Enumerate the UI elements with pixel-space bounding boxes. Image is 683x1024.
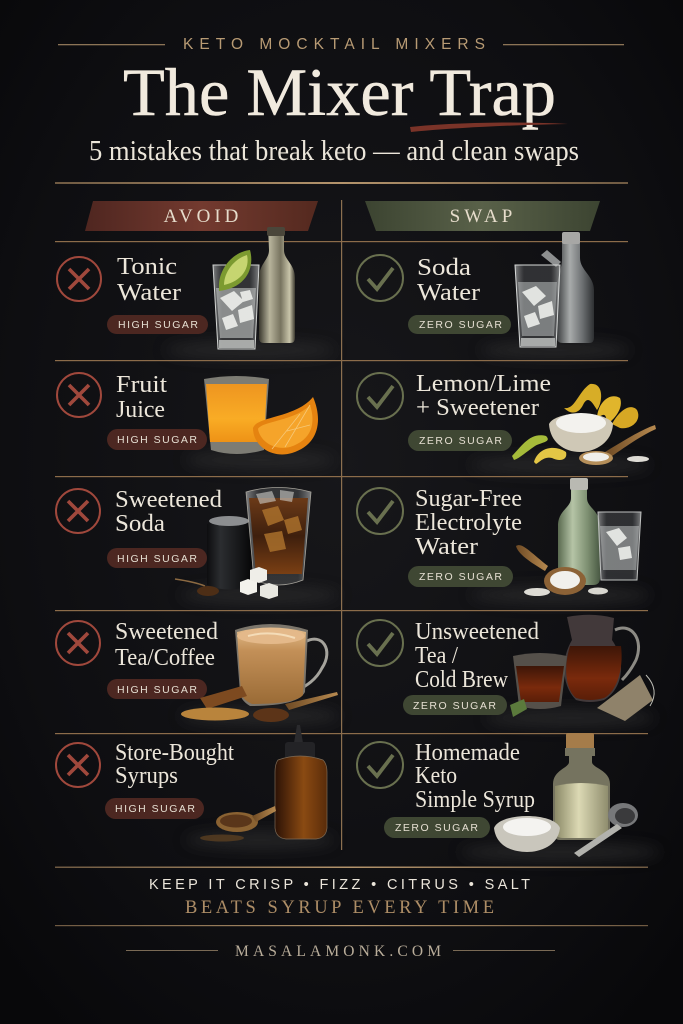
title: The Mixer Trap xyxy=(123,54,556,130)
label xyxy=(115,740,234,789)
badge: HIGH SUGAR xyxy=(115,803,197,815)
avoid banner xyxy=(85,201,318,231)
title underline brush stroke xyxy=(410,123,568,132)
illustration: soda bottle and glass xyxy=(515,232,594,347)
icon: x xyxy=(56,489,100,533)
badge: ZERO SUGAR xyxy=(419,435,503,447)
row: soda water xyxy=(357,232,594,347)
subtitle: 5 mistakes that break keto — and clean swaps xyxy=(89,136,579,167)
badge xyxy=(403,695,507,715)
footer tagline xyxy=(149,877,530,918)
label: Sugar-Free xyxy=(415,486,522,512)
badge xyxy=(408,315,511,334)
label: Soda xyxy=(417,255,471,281)
illustration: electrolyte bottle, glass, spoon xyxy=(516,478,641,596)
swap banner xyxy=(365,201,600,231)
row: homemade keto syrup xyxy=(357,733,638,857)
badge: HIGH SUGAR xyxy=(117,684,199,696)
header divider xyxy=(55,182,628,184)
label xyxy=(415,619,539,693)
row: tonic water xyxy=(57,227,295,349)
row: fruit juice xyxy=(57,372,318,454)
website credit: MASALAMONK.COM xyxy=(235,943,441,960)
label: Water xyxy=(417,280,480,306)
illustration: citrus peel, sweetener bowl, spoon xyxy=(512,384,656,465)
row: electrolyte water xyxy=(357,478,641,596)
label xyxy=(417,255,480,306)
label: Juice xyxy=(116,397,165,423)
badge xyxy=(107,315,208,334)
badge: HIGH SUGAR xyxy=(117,434,199,446)
icon: x xyxy=(56,743,100,787)
label: Sweetened xyxy=(115,619,218,645)
badge xyxy=(384,817,490,838)
badge xyxy=(107,548,207,568)
floor glow xyxy=(165,341,660,861)
header xyxy=(58,36,624,167)
footer tagline: BEATS SYRUP EVERY TIME xyxy=(185,898,494,918)
label xyxy=(116,372,167,423)
row: sweetened soda xyxy=(56,487,311,599)
grid dividers xyxy=(55,200,648,850)
label xyxy=(115,487,222,537)
label: Store-Bought xyxy=(115,740,234,766)
icon: check xyxy=(357,255,403,301)
illustration: pitcher, glass, tea bag xyxy=(510,615,654,721)
label: Tonic xyxy=(117,254,177,280)
badge: ZERO SUGAR xyxy=(419,319,503,331)
icon: x xyxy=(57,257,101,301)
illustration: tonic and lime xyxy=(213,227,295,349)
badge: ZERO SUGAR xyxy=(413,700,497,712)
label xyxy=(117,254,181,306)
label: Soda xyxy=(115,511,165,537)
badge xyxy=(105,798,204,819)
illustration: juice and orange wedge xyxy=(204,376,318,454)
illustration: syrup bottle and spoon xyxy=(200,725,327,842)
label xyxy=(415,740,535,813)
footer tagline: KEEP IT CRISP • FIZZ • CITRUS • SALT xyxy=(149,877,530,893)
eyebrow: KETO MOCKTAIL MIXERS xyxy=(183,36,485,53)
badge xyxy=(408,430,512,451)
footer rule top xyxy=(55,866,648,868)
label: + Sweetener xyxy=(416,395,539,421)
icon: check xyxy=(357,620,403,666)
row: lemon lime sweetener xyxy=(357,371,656,465)
label: Lemon/Lime xyxy=(416,371,551,397)
label: Unsweetened xyxy=(415,619,539,645)
badge: HIGH SUGAR xyxy=(117,553,199,565)
label: Simple Syrup xyxy=(415,787,535,813)
label: Tea / xyxy=(415,643,458,669)
avoid banner: AVOID xyxy=(164,206,242,227)
label xyxy=(415,486,522,560)
icon: x xyxy=(56,621,100,665)
label: Water xyxy=(117,280,181,306)
row: unsweetened tea cold brew xyxy=(357,615,654,721)
label xyxy=(115,619,218,671)
label: Tea/Coffee xyxy=(115,645,215,671)
label: Homemade xyxy=(415,740,520,766)
badge xyxy=(107,679,207,699)
label: Water xyxy=(415,534,478,560)
footer rule bottom xyxy=(55,925,648,926)
icon: check xyxy=(357,373,403,419)
label: Electrolyte xyxy=(415,510,522,536)
label: Syrups xyxy=(115,763,178,789)
row: store bought syrups xyxy=(56,725,327,842)
icon: check xyxy=(357,488,403,534)
label xyxy=(416,371,551,421)
label: Sweetened xyxy=(115,487,222,513)
row: sweetened tea coffee xyxy=(56,619,338,722)
icon: check xyxy=(357,742,403,788)
illustration: latte and brown sugar xyxy=(181,624,338,722)
icon: x xyxy=(57,373,101,417)
badge: HIGH SUGAR xyxy=(118,319,200,331)
badge: ZERO SUGAR xyxy=(419,571,503,583)
badge xyxy=(107,429,207,450)
illustration: cola, can, sugar cubes xyxy=(175,488,311,599)
illustration: syrup jar, bowl, spoon xyxy=(494,733,638,857)
label: Cold Brew xyxy=(415,667,509,693)
label: Fruit xyxy=(116,372,167,398)
swap banner: SWAP xyxy=(450,206,516,227)
badge xyxy=(408,566,513,587)
label: Keto xyxy=(415,763,457,789)
badge: ZERO SUGAR xyxy=(395,822,479,834)
